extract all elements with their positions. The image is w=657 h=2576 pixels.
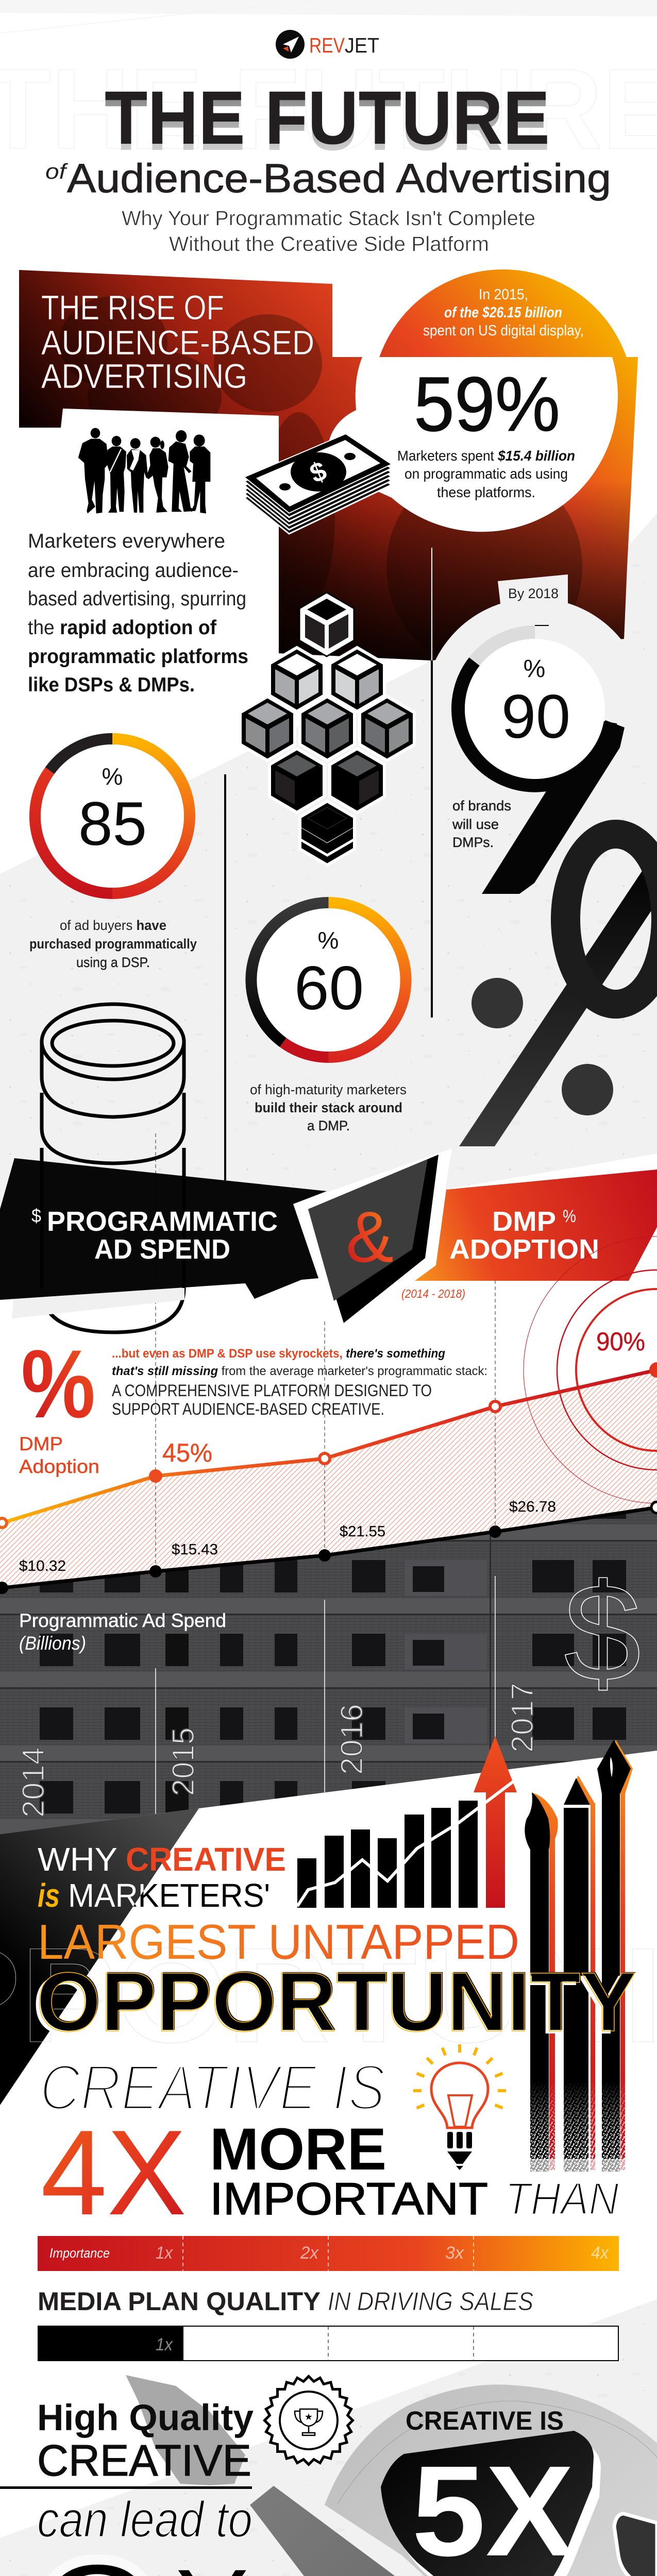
caption: 90 percent of brands: will use	[452, 817, 499, 832]
chart: media plan bar	[38, 2326, 618, 2361]
caption: 60 percent of marketers: of high-maturity marketers	[250, 1082, 407, 1097]
caption: 60 percent of marketers: build their stack around	[255, 1100, 402, 1115]
caption: 85 percent of ad buyers: of ad buyers have	[60, 918, 166, 933]
label: programmatic ad spend billions: (Billions)	[19, 1633, 86, 1654]
chart: 85 percent donut: %	[102, 763, 123, 790]
text: something still missing: ...but even as DMP & DSP use skyrockets, there's something	[112, 1347, 445, 1361]
label: 45 percent: 45%	[162, 1438, 212, 1467]
heading: opportunity: OPPORTUNITY	[37, 1954, 637, 2048]
text: marketers everywhere paragraph: based advertising, spurring	[28, 588, 246, 610]
panel: white diagonal section background	[0, 1751, 657, 2303]
label: 90 percent: 90%	[596, 1327, 645, 1356]
chart: importance bar: 2x	[300, 2243, 319, 2263]
heading: why creative is marketers': MARKETERS'	[68, 1877, 270, 1914]
caption: 90 percent of brands	[452, 798, 511, 850]
chart: importance bar: 1x	[156, 2243, 173, 2263]
label: DMP adoption	[19, 1433, 99, 1477]
chart: 90 percent donut: 90	[501, 682, 570, 751]
label: by 2018: By 2018	[508, 586, 559, 601]
chart: 60 percent donut: %	[318, 927, 339, 954]
label: date range: (2014 - 2018)	[401, 1287, 465, 1300]
icon: giant percent sign	[459, 820, 657, 1146]
text: marketers everywhere paragraph: Marketers everywhere	[28, 530, 225, 552]
heading: creative is: CREATIVE IS	[40, 2052, 385, 2124]
text: In 2015 of the 26.15 billion	[423, 286, 584, 339]
heading: opportunity: OPPORTUNITY	[32, 1957, 632, 2052]
heading: why creative is marketers': is	[38, 1877, 60, 1914]
text: something still missing	[112, 1347, 487, 1418]
heading: The Rise of Audience-Based Advertising: AUDIENCE-BASED	[41, 324, 314, 362]
icon: red percent: %	[21, 1330, 95, 1438]
text: marketers everywhere paragraph: like DSPs & DMPs.	[28, 674, 195, 696]
background: top grey band	[0, 0, 657, 33]
label: programmatic ad spend billions: Programmatic Ad Spend	[19, 1610, 226, 1631]
icon: group of people silhouettes	[78, 428, 210, 514]
callout: 59 percent bubble: these platforms.	[437, 484, 535, 500]
text: marketers everywhere paragraph: are embracing audience-	[28, 560, 239, 582]
text: something still missing: that's still missing from the average marketer's programmatic stack:	[112, 1364, 487, 1378]
callout: 59 percent bubble	[327, 357, 618, 532]
labels: years	[16, 1683, 540, 1818]
icon: database cylinder	[42, 1004, 184, 1332]
heading: The Rise of Audience-Based Advertising: ADVERTISING	[41, 357, 247, 396]
label: DMP adoption: Adoption	[19, 1456, 99, 1477]
heading: The Rise of Audience-Based Advertising: THE RISE OF	[41, 289, 224, 327]
grey disc behind 90 percent	[424, 574, 646, 820]
banner: DMP adoption: ADOPTION	[449, 1234, 599, 1265]
text: high quality creative can lead to: CREATIVE	[37, 2436, 251, 2485]
caption: 90 percent of brands: of brands	[452, 798, 511, 814]
labels: spend values: $21.55	[340, 1523, 385, 1540]
caption: 60 percent of marketers: a DMP.	[307, 1118, 350, 1133]
banner: DMP adoption: %	[563, 1207, 576, 1226]
text: something still missing: SUPPORT AUDIENCE-BASED CREATIVE.	[112, 1400, 384, 1418]
stat: 4x more important than	[41, 2105, 619, 2240]
dashed year guides	[156, 1133, 495, 1567]
subtitle: of Audience-Based Advertising: of	[45, 159, 69, 183]
icon: outline dollar: $	[564, 1555, 641, 1710]
text: In 2015 of the 26.15 billion: of the $26.15 billion	[444, 304, 562, 321]
labels: spend values	[19, 1499, 556, 1574]
labels: spend values: $15.43	[172, 1541, 218, 1558]
text: something still missing: A COMPREHENSIVE PLATFORM DESIGNED TO	[112, 1381, 432, 1400]
heading: why creative is marketers': CREATIVE	[126, 1841, 286, 1878]
tagline: Without the Creative Side Platform	[169, 233, 489, 256]
banner: programmatic ad spend: AD SPEND	[94, 1234, 230, 1265]
text: 2x	[27, 2503, 252, 2576]
banner: programmatic ad spend: $	[31, 1205, 41, 1226]
callout: 59 percent bubble: on programmatic ads using	[405, 466, 568, 482]
panel: chart hatched area	[0, 1370, 657, 1588]
banner: programmatic ad spend	[0, 1158, 327, 1300]
chart: 60 percent donut	[251, 903, 406, 1057]
banner: DMP adoption: DMP	[492, 1206, 556, 1237]
background: paper band and lower marble	[0, 2299, 657, 2576]
subtitle: of Audience-Based Advertising: Audience-Based Advertising	[67, 155, 611, 201]
callout: 59 percent bubble: 59%	[414, 361, 560, 447]
text: marketers everywhere paragraph: the rapid adoption of	[28, 617, 217, 639]
labels: years: 2015	[166, 1727, 200, 1796]
heading: media plan quality: MEDIA PLAN QUALITY	[38, 2287, 321, 2316]
shadow under black banner	[12, 1288, 184, 1318]
chart: target rings at 90 percent	[524, 1236, 657, 1503]
chart: 85 percent donut: 85	[78, 789, 147, 858]
stat: 4x more important than: THAN	[505, 2173, 619, 2224]
stat: creative is 5x: CREATIVE IS	[406, 2406, 564, 2435]
icon: ampersand shield: &	[346, 1196, 394, 1277]
chart: importance bar	[38, 2236, 619, 2271]
divider lines	[225, 660, 432, 1180]
labels: spend values: $10.32	[19, 1558, 66, 1574]
stat: 4x more important than: IMPORTANT	[210, 2173, 488, 2224]
caption: 90 percent of brands: DMPs.	[452, 835, 494, 850]
banner: programmatic ad spend: PROGRAMMATIC	[47, 1206, 278, 1237]
banner: DMP adoption	[415, 1170, 657, 1281]
text: In 2015 of the 26.15 billion: spent on US digital display,	[423, 323, 584, 339]
icon: lightbulb with pencil base	[413, 2044, 506, 2170]
panel: rise of audience-based advertising	[19, 269, 643, 670]
chart: 85 percent donut	[35, 739, 190, 893]
caption: 60 percent of marketers	[250, 1082, 407, 1133]
icon: cube cluster	[240, 592, 414, 865]
icon: paintbrush, pencil and pen	[525, 1740, 633, 2174]
background: grey paper diagonal	[0, 513, 657, 1236]
chart: programmatic spend line	[0, 1502, 657, 1594]
illustration: paint brush and palette	[126, 2375, 657, 2576]
chart: DMP adoption line	[0, 1362, 657, 1528]
title: The Future: THE FUTURE	[105, 82, 550, 166]
tagline: Why Your Programmatic Stack Isn't Complete	[122, 207, 535, 230]
caption: 85 percent of ad buyers	[29, 918, 197, 970]
heading: why creative is marketers'	[38, 1848, 285, 1907]
chart: importance bar: 4x	[591, 2243, 609, 2263]
caption: 85 percent of ad buyers: purchased programmatically	[29, 936, 197, 952]
chart: 90 percent donut: %	[524, 655, 545, 683]
text: marketers everywhere paragraph: programmatic platforms	[28, 646, 248, 668]
callout: 59 percent bubble: Marketers spent $15.4 billion	[397, 448, 575, 464]
heading: why creative is marketers': WHY	[38, 1841, 117, 1878]
panel: building photo	[0, 1504, 657, 1839]
labels: years: 2016	[334, 1704, 369, 1775]
logo: RevJet header: REV	[309, 33, 345, 57]
icon: stack of money: $	[306, 456, 331, 489]
labels: years: 2014	[16, 1747, 50, 1818]
text: In 2015 of the 26.15 billion: In 2015,	[479, 286, 528, 303]
chart: 90 percent donut	[458, 625, 625, 894]
title: The Future: THE FUTURE	[105, 76, 550, 160]
stat: creative is 5x	[381, 2406, 657, 2576]
heading: opportunity: OPPORTUNITY	[36, 1955, 636, 2049]
stat: 4x more important than: MORE	[210, 2116, 386, 2182]
icon: ampersand shield	[293, 1148, 452, 1325]
text: high quality creative can lead to: High Quality	[37, 2398, 254, 2438]
white guide lines in building	[156, 1576, 495, 1814]
logo: RevJet header: JET	[345, 33, 379, 57]
label: programmatic ad spend billions	[19, 1610, 226, 1654]
stat: 4x more important than: 4X	[41, 2105, 187, 2240]
heading: media plan quality: IN DRIVING SALES	[328, 2287, 533, 2316]
heading: media plan quality	[38, 2287, 533, 2316]
heading: The Rise of Audience-Based Advertising	[41, 289, 314, 396]
caption: 85 percent of ad buyers: using a DSP.	[76, 955, 150, 970]
labels: years: 2017	[505, 1683, 540, 1753]
icon: bar chart with arrow	[297, 1736, 517, 1908]
tagline	[122, 207, 535, 256]
logo: RevJet header	[276, 30, 379, 59]
heading: largest untapped: LARGEST UNTAPPED	[38, 1914, 519, 1970]
heading: why creative is marketers': MARKETERS'	[68, 1877, 270, 1914]
text: high quality creative can lead to	[0, 2398, 254, 2548]
chart: importance bar: 3x	[445, 2243, 464, 2263]
labels: spend values: $26.78	[509, 1499, 556, 1515]
text: high quality creative can lead to: can lead to	[37, 2491, 252, 2548]
label: DMP adoption: DMP	[19, 1433, 63, 1454]
text: marketers everywhere paragraph	[28, 530, 248, 696]
chart: importance bar: Importance	[49, 2245, 110, 2261]
panel: black diagonal	[0, 1808, 199, 2105]
icon: rosette trophy badge	[263, 2375, 355, 2466]
icon: rosette trophy badge: ★	[305, 2412, 313, 2422]
icon: stack of money	[244, 434, 392, 534]
chart: 60 percent donut: 60	[294, 954, 364, 1023]
chart: media plan bar: 1x	[156, 2335, 173, 2354]
